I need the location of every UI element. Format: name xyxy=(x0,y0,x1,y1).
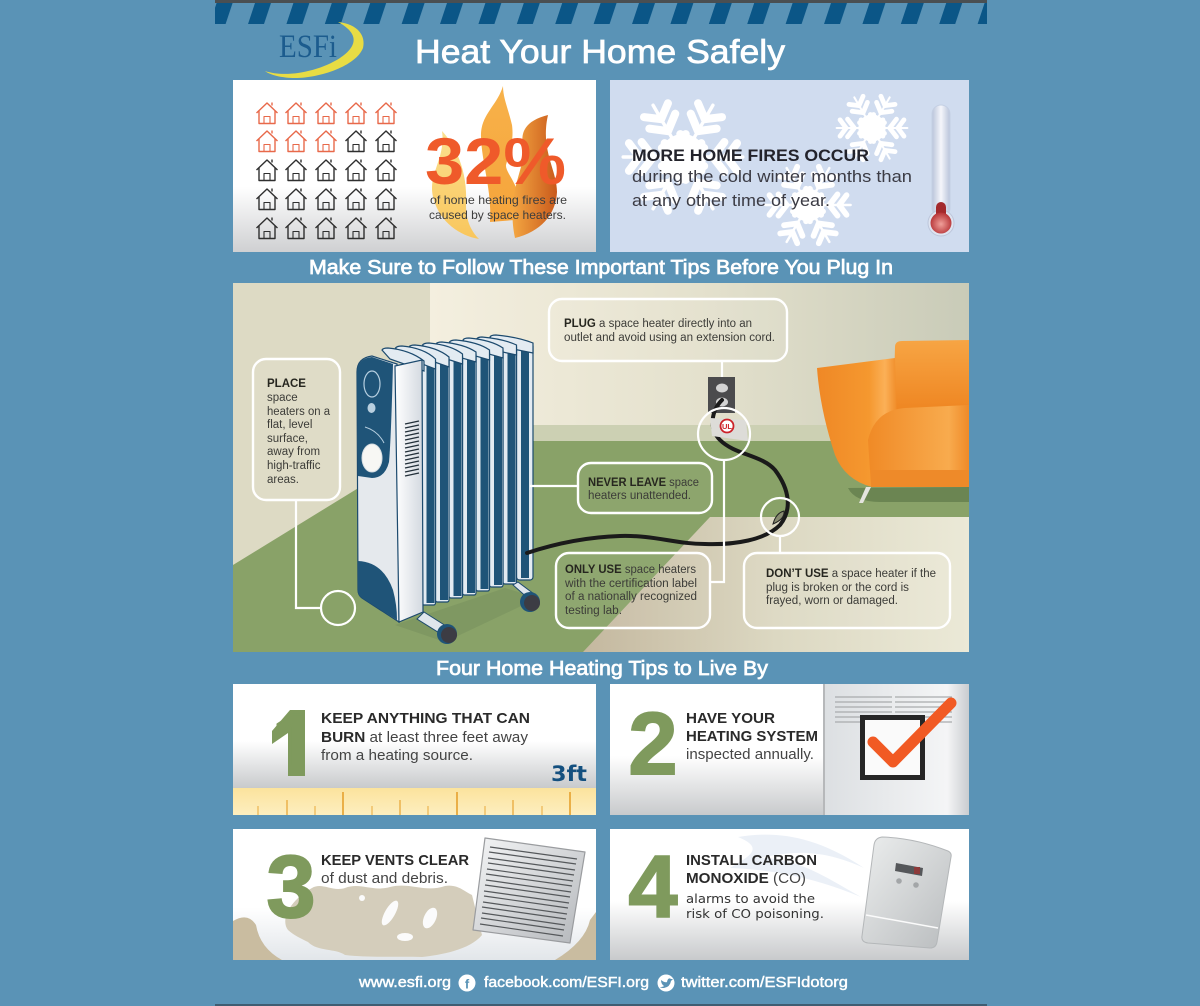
icon: thermometer xyxy=(928,105,954,236)
tip 3 text xyxy=(321,852,469,887)
panel: tip 1 xyxy=(233,684,596,815)
icon: wall outlet xyxy=(708,377,735,413)
icon: power cord xyxy=(527,400,788,553)
heading: four tips: Four Home Heating Tips to Live By xyxy=(436,658,768,680)
logo: ESFi xyxy=(265,22,364,78)
stat caption: of home heating fires are xyxy=(430,193,567,207)
heater vent slots xyxy=(405,421,419,476)
top dark edge and hazard stripe band xyxy=(215,0,987,24)
number 1: 1 xyxy=(272,695,320,794)
wall unit xyxy=(824,684,969,815)
winter text: during the cold winter months than xyxy=(632,167,912,186)
callout: don't use: DON’T USE a space heater if the xyxy=(766,568,936,580)
winter text: at any other time of year. xyxy=(632,191,830,210)
callout: only use: with the certification label xyxy=(564,578,697,590)
heater legs and wheels xyxy=(417,582,540,644)
icon: CO alarm xyxy=(862,837,951,948)
heater body xyxy=(357,356,399,622)
bottom dark edge xyxy=(215,1004,987,1006)
tip 2 text: inspected annually. xyxy=(686,746,814,763)
callout: plug xyxy=(549,299,787,361)
callout: place: surface, xyxy=(267,433,308,445)
icon: flames xyxy=(432,86,557,239)
dust on the floor xyxy=(233,886,596,960)
title: Heat Your Home Safely xyxy=(415,33,786,70)
tip 1 text xyxy=(321,710,530,764)
winter text xyxy=(632,146,912,210)
callout: never leave: heaters unattended. xyxy=(588,490,691,502)
icon: CO wisps xyxy=(730,835,864,897)
room background xyxy=(233,283,969,652)
panel: winter fires xyxy=(602,76,969,263)
icon: UL certification label: UL xyxy=(722,422,732,431)
icon: checkbox with check mark xyxy=(862,703,951,778)
callout: don't use: plug is broken or the cord is xyxy=(766,582,909,594)
callout: plug: outlet and avoid using an extension cord. xyxy=(564,332,775,344)
heater fins xyxy=(382,335,533,605)
callout: place: areas. xyxy=(267,474,299,486)
callout leader lines and circles xyxy=(296,361,799,625)
callout: only use: of a nationally recognized xyxy=(565,591,697,603)
callout: plug: PLUG a space heater directly into an xyxy=(564,318,752,330)
callout: never leave: NEVER LEAVE space xyxy=(588,477,699,489)
panel: 32% statistic xyxy=(233,80,596,252)
tip 1 text: from a heating source. xyxy=(321,747,473,764)
tip 4 text: MONOXIDE (CO) xyxy=(686,870,806,887)
number 1 xyxy=(272,710,305,776)
tip 2 text xyxy=(686,710,818,763)
number 2: 2 xyxy=(629,694,677,793)
callout: place: high-traffic xyxy=(267,460,321,472)
callout: place: away from xyxy=(267,446,320,458)
footer links: www.esfi.org xyxy=(358,974,451,991)
callout: don't use: frayed, worn or damaged. xyxy=(766,595,898,607)
grille lines xyxy=(835,697,952,722)
callout: place: space xyxy=(267,392,298,404)
logo: ESFi: ESFi xyxy=(279,29,337,65)
tip 2 text: HEATING SYSTEM xyxy=(686,728,818,745)
ruler xyxy=(233,788,596,815)
icon: UL certification label xyxy=(710,418,748,441)
callout: place: heaters on a xyxy=(267,406,331,418)
winter text: MORE HOME FIRES OCCUR xyxy=(632,146,869,165)
tip 4 text: alarms to avoid the xyxy=(686,891,815,906)
icon: air vent xyxy=(473,838,585,943)
panel: tip 4 xyxy=(610,829,969,960)
stat caption xyxy=(429,193,567,222)
icon: facebook xyxy=(458,974,476,992)
tip 1 text: KEEP ANYTHING THAT CAN xyxy=(321,710,530,727)
icon grid: 8 of 25 houses highlighted xyxy=(256,102,396,238)
panel: tip 2 xyxy=(610,684,969,815)
callout: place: PLACE xyxy=(267,378,306,390)
icon: facebook: f xyxy=(465,976,470,992)
tip 3 text: KEEP VENTS CLEAR xyxy=(321,852,469,869)
tip 4 text: INSTALL CARBON xyxy=(686,852,817,869)
tip 4 text xyxy=(686,852,824,921)
3ft label: 3ft xyxy=(551,762,587,786)
panel: room scene xyxy=(233,283,969,652)
icon: frayed cord plug xyxy=(773,511,784,524)
callout: don't use xyxy=(744,553,950,628)
callout: place xyxy=(253,359,340,500)
icon: sofa xyxy=(817,340,969,503)
heater control panel xyxy=(357,357,393,478)
callout: never leave xyxy=(578,463,712,513)
tip 4 text: risk of CO poisoning. xyxy=(686,906,824,921)
tip 3 text: of dust and debris. xyxy=(321,870,448,887)
footer links xyxy=(358,974,848,992)
tip 1 text: BURN at least three feet away xyxy=(321,729,529,746)
panel: tip 3 xyxy=(233,829,596,960)
icon: twitter xyxy=(658,974,674,992)
stat caption: caused by space heaters. xyxy=(429,208,566,222)
dust gaps xyxy=(359,895,440,941)
callout: place: flat, level xyxy=(267,419,312,431)
callout: only use xyxy=(556,553,710,628)
icon: space heater xyxy=(357,335,540,644)
footer links: twitter.com/ESFIdotorg xyxy=(681,974,848,991)
footer links: facebook.com/ESFI.org xyxy=(484,974,649,991)
tip 2 text: HAVE YOUR xyxy=(686,710,775,727)
callout: only use: testing lab. xyxy=(565,605,622,617)
big number 32%: 32% xyxy=(425,124,566,198)
callout: only use: ONLY USE space heaters xyxy=(565,564,696,576)
icon: snowflakes xyxy=(602,76,920,263)
number 3: 3 xyxy=(267,837,315,936)
number 4: 4 xyxy=(629,837,678,936)
heading: plug in tips: Make Sure to Follow These Important Tips Before You Plug In xyxy=(309,257,893,279)
